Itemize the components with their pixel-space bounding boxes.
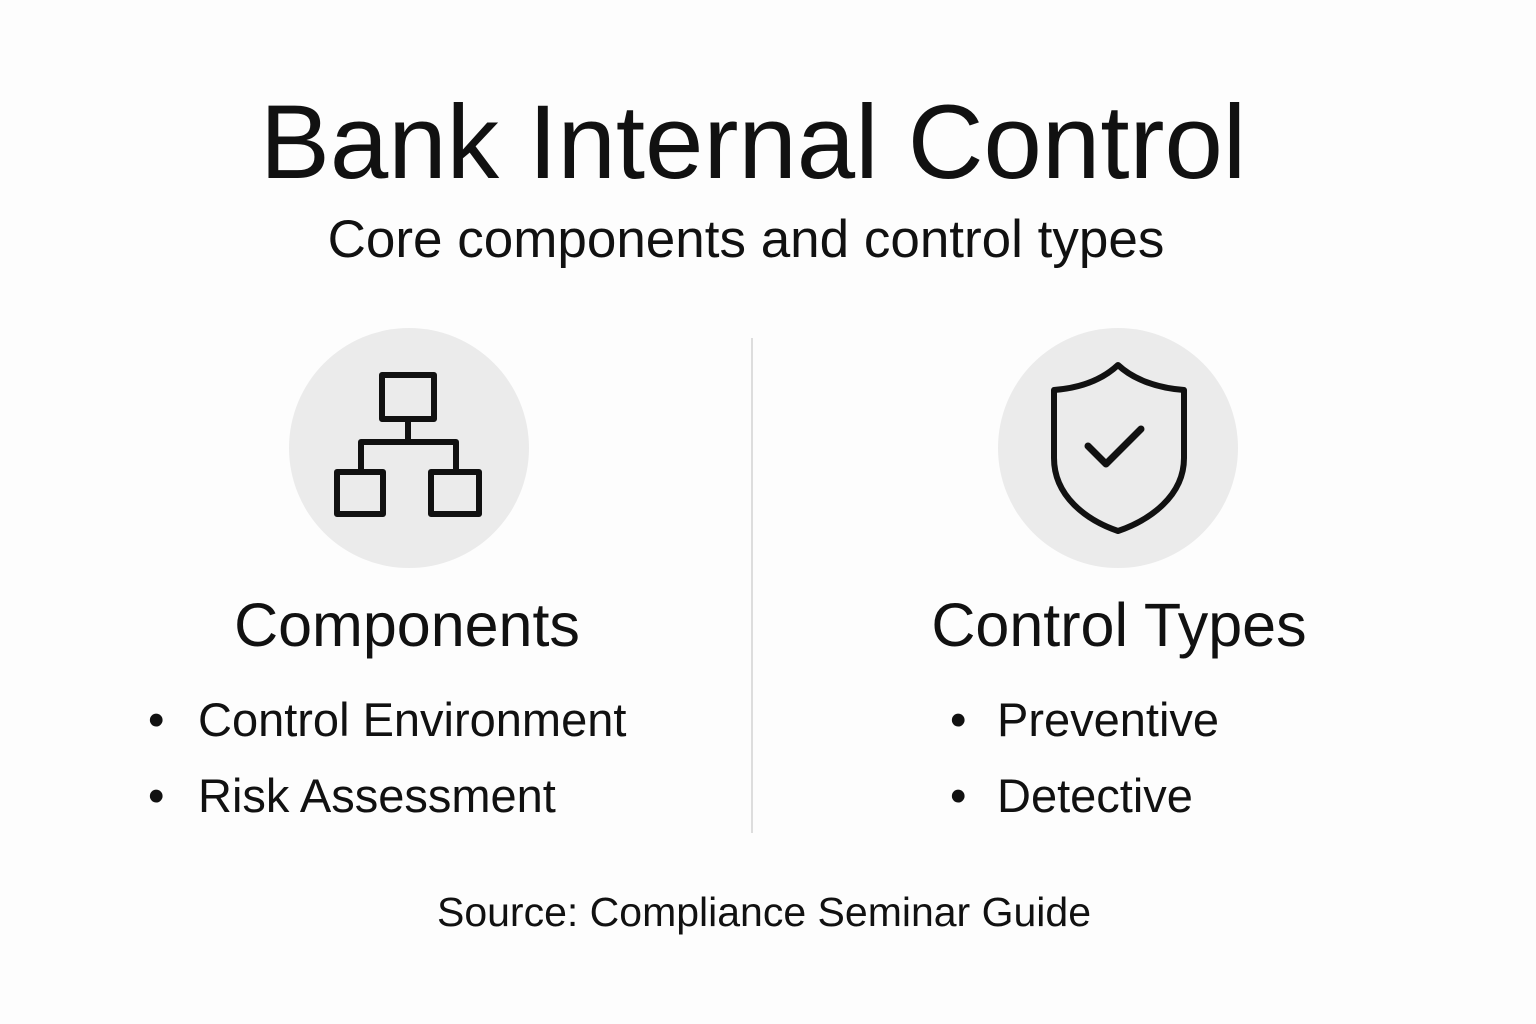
title: Bank Internal Control [260, 84, 1246, 201]
source: Source: Compliance Seminar Guide [437, 889, 1091, 935]
list: control types: • [950, 693, 966, 746]
list: components [148, 693, 626, 822]
list: control types: • [950, 769, 966, 822]
list: components: • [148, 693, 164, 746]
panel: components [148, 328, 626, 822]
subtitle: Core components and control types [328, 210, 1164, 269]
list: control types [950, 693, 1219, 822]
divider [751, 338, 753, 833]
list: components: Control Environment [198, 693, 626, 746]
list: control types: Preventive [997, 693, 1219, 746]
heading: Components: Components [234, 591, 580, 659]
icon: org chart [289, 328, 529, 568]
heading: Control Types: Control Types [931, 591, 1307, 659]
icon: shield check [998, 328, 1238, 568]
list: components: Risk Assessment [198, 769, 556, 822]
list: components: • [148, 769, 164, 822]
panel: control types [931, 328, 1307, 822]
list: control types: Detective [997, 769, 1193, 822]
